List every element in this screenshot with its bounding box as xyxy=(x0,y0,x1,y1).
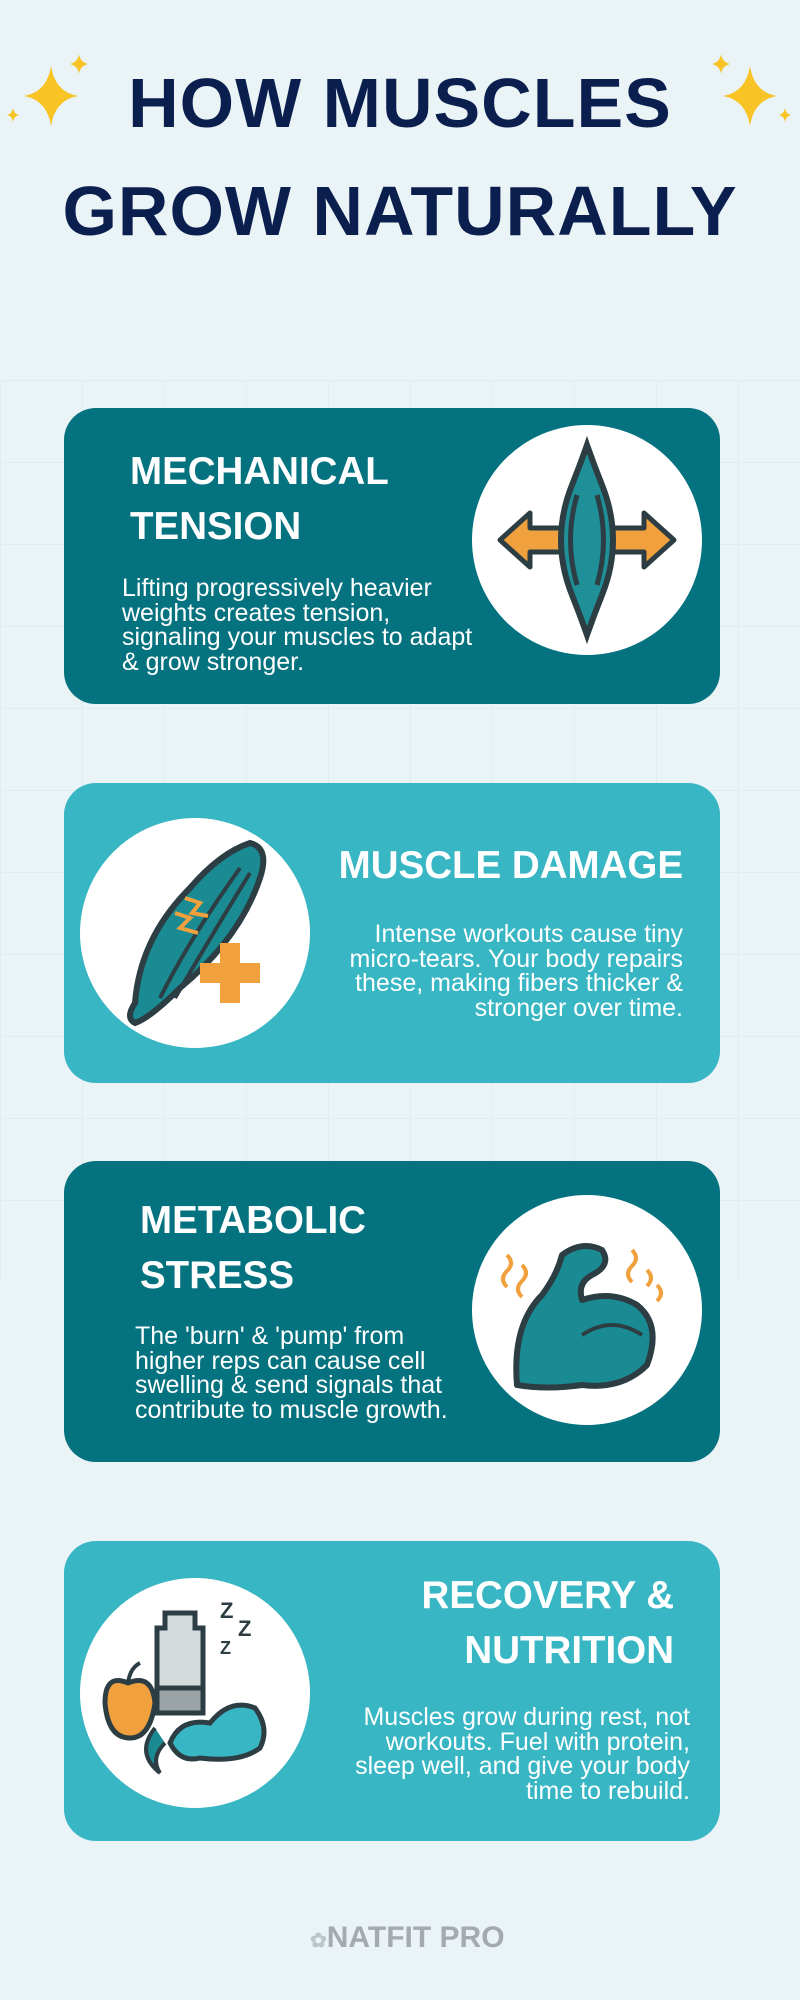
title xyxy=(62,64,738,250)
panel: muscle damage xyxy=(64,783,720,1083)
text block: swelling & send signals that xyxy=(135,1371,442,1399)
heading: NUTRITION xyxy=(464,1629,674,1672)
text block: workouts. Fuel with protein, xyxy=(386,1728,690,1756)
heading xyxy=(130,450,389,548)
icon: flexed arm with heat xyxy=(472,1195,702,1425)
text block xyxy=(135,1322,448,1424)
panel: metabolic stress xyxy=(64,1161,720,1462)
text block: Lifting progressively heavier xyxy=(122,574,432,602)
text block: signaling your muscles to adapt xyxy=(122,623,472,651)
text block: sleep well, and give your body xyxy=(355,1752,690,1780)
icon: apple, bottle, sleep, arm: Z xyxy=(238,1616,251,1641)
icon: apple, bottle, sleep, arm xyxy=(80,1578,310,1808)
heading: MECHANICAL xyxy=(130,450,389,493)
sparkles right xyxy=(712,54,791,126)
text block: Intense workouts cause tiny xyxy=(374,920,683,948)
text block: weights creates tension, xyxy=(122,598,390,626)
text block xyxy=(122,574,472,676)
text block: higher reps can cause cell xyxy=(135,1346,425,1374)
text block xyxy=(350,920,683,1022)
heading: STRESS xyxy=(140,1254,294,1297)
icon: apple, bottle, sleep, arm: Z xyxy=(220,1638,231,1658)
heading xyxy=(422,1574,674,1672)
panel: recovery & nutrition xyxy=(64,1541,720,1841)
text block: The 'burn' & 'pump' from xyxy=(135,1322,404,1350)
heading: METABOLIC xyxy=(140,1199,366,1242)
title: HOW MUSCLES xyxy=(128,64,672,142)
heading: MUSCLE DAMAGE xyxy=(339,844,683,887)
title: GROW NATURALLY xyxy=(62,172,738,250)
text block: contribute to muscle growth. xyxy=(135,1396,448,1424)
text block: Muscles grow during rest, not xyxy=(363,1703,690,1731)
heading xyxy=(140,1199,366,1297)
heading: RECOVERY & xyxy=(422,1574,674,1617)
text block: these, making fibers thicker & xyxy=(355,969,683,997)
text block: stronger over time. xyxy=(475,994,683,1022)
text block: & grow stronger. xyxy=(122,648,304,676)
icon: torn muscle with plus xyxy=(80,818,310,1048)
sparkles left xyxy=(7,54,88,126)
footer logo: ✿NATFIT PRO xyxy=(310,1921,505,1954)
icon: stretched muscle xyxy=(472,425,702,655)
icon: apple, bottle, sleep, arm: Z xyxy=(220,1598,233,1623)
text block: micro-tears. Your body repairs xyxy=(350,944,683,972)
text block: time to rebuild. xyxy=(526,1776,690,1804)
panel: mechanical tension xyxy=(64,408,720,704)
heading: TENSION xyxy=(130,505,301,548)
text block xyxy=(355,1703,690,1804)
